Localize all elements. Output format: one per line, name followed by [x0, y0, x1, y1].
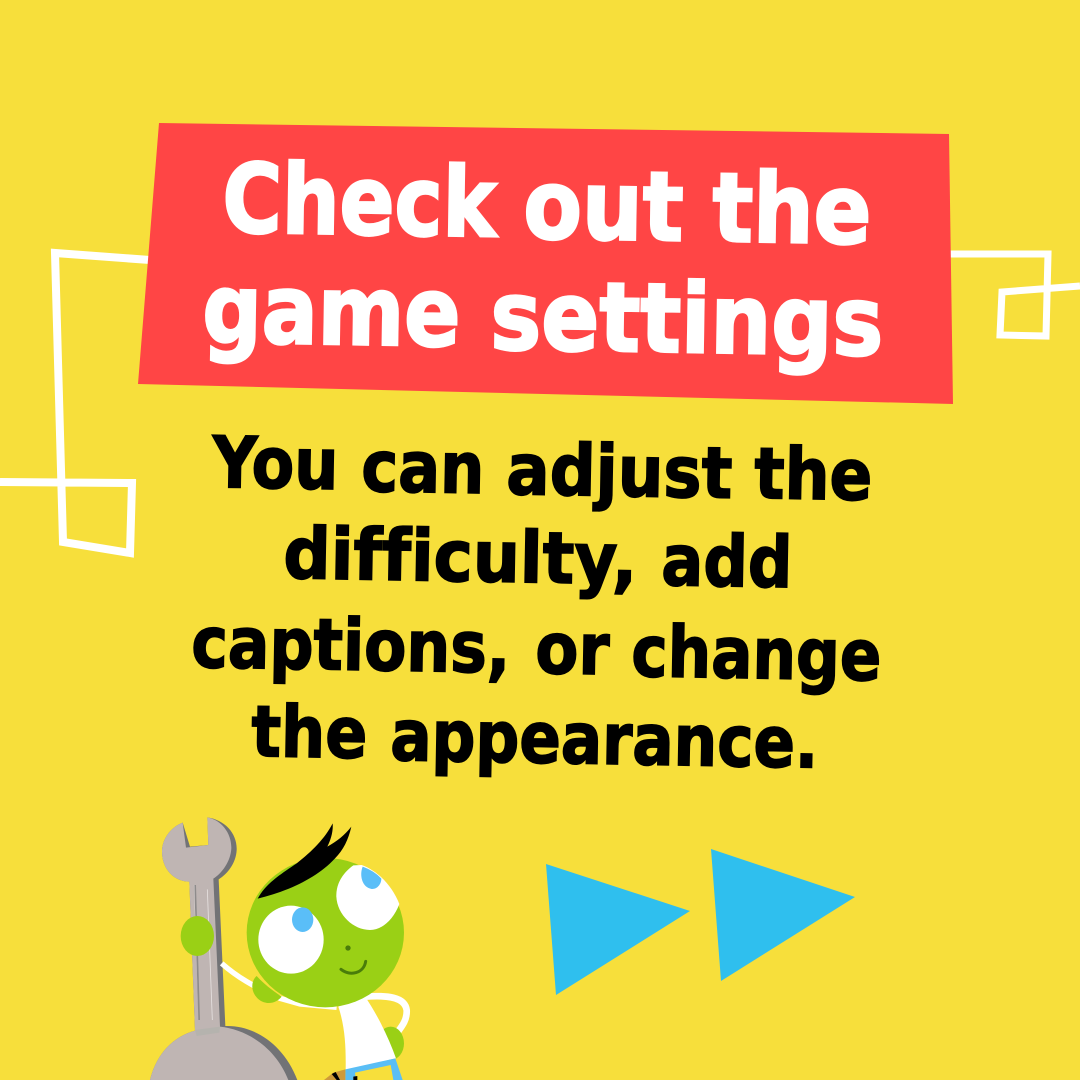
heading text: settings — [490, 260, 884, 378]
body text — [191, 421, 882, 784]
right arm — [365, 996, 407, 1033]
head — [247, 858, 404, 1007]
heading text: out — [523, 149, 684, 264]
right eye — [336, 865, 399, 930]
body text: adjust — [506, 428, 733, 515]
icon: wrench — [150, 817, 297, 1080]
body text: captions, — [191, 601, 511, 690]
nose — [345, 945, 351, 951]
chin hand — [252, 976, 282, 1003]
body text: change — [631, 610, 882, 697]
hair — [258, 823, 351, 899]
hand on wrench — [181, 916, 214, 956]
body text: the — [754, 432, 873, 517]
body text: difficulty, — [283, 512, 638, 601]
heading text — [202, 143, 884, 378]
body text: can — [361, 425, 485, 510]
heading text: the — [712, 152, 872, 266]
heading text: Check — [222, 143, 499, 259]
heading banner — [138, 123, 953, 404]
heading text: game — [202, 253, 461, 369]
body text: add — [661, 519, 793, 604]
arrows: next — [546, 849, 855, 995]
body text: the — [251, 690, 368, 775]
shorts — [345, 1058, 403, 1080]
hand on hip — [377, 1027, 404, 1060]
body text: or — [535, 607, 610, 691]
body text: appearance. — [390, 694, 819, 784]
character with wrench — [150, 817, 407, 1080]
left arm — [222, 963, 337, 1007]
left eye — [258, 906, 324, 974]
shirt — [338, 995, 396, 1070]
body text: You — [211, 421, 339, 506]
smile — [341, 961, 366, 973]
